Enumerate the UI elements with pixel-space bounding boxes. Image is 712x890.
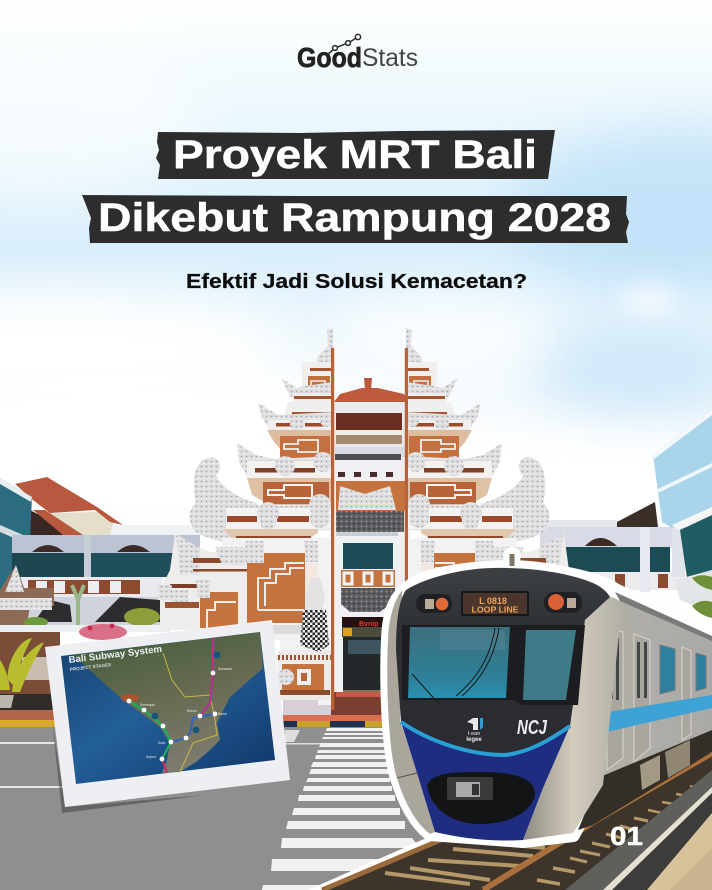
orange tiled roof bbox=[15, 477, 123, 525]
dark sloped roof bbox=[617, 502, 658, 527]
cyan curved line bbox=[401, 722, 570, 755]
steps bbox=[330, 692, 400, 716]
ledge and flowers bbox=[0, 625, 170, 632]
blue side stripe bbox=[602, 695, 712, 733]
wipers bbox=[412, 628, 499, 705]
left windscreen bbox=[408, 627, 510, 698]
right headlight bbox=[544, 592, 582, 613]
destination display: L 0818 bbox=[479, 596, 507, 606]
pale upper wall bbox=[105, 525, 205, 535]
glass tower teal lower bbox=[680, 515, 712, 578]
operator logo bbox=[466, 718, 483, 743]
railway track bbox=[308, 735, 712, 890]
blue route bbox=[171, 714, 215, 742]
upper window bbox=[343, 543, 393, 569]
page number: 01 bbox=[610, 821, 643, 851]
left headlight bbox=[416, 594, 452, 613]
land bbox=[73, 632, 263, 773]
temple gate right tower bbox=[405, 328, 581, 710]
icon: rising line chart bbox=[327, 34, 361, 55]
destination display: LOOP LINE bbox=[472, 604, 519, 614]
roof antenna bump bbox=[503, 547, 521, 565]
station labels: Kuta bbox=[158, 741, 165, 745]
statue with checked cloth bbox=[300, 578, 329, 652]
station labels: Renon bbox=[187, 709, 197, 713]
sea bbox=[61, 632, 275, 784]
right background building bbox=[540, 410, 712, 618]
destination display bbox=[461, 591, 529, 616]
square motif band bbox=[341, 570, 395, 587]
carved lintel bbox=[341, 588, 395, 612]
blue lower front bbox=[401, 722, 570, 841]
sleepers bbox=[385, 786, 700, 884]
temple gate left tower bbox=[158, 328, 334, 710]
open pavilion bbox=[334, 403, 406, 447]
undercarriage bbox=[578, 730, 712, 830]
operator logo: legee bbox=[466, 737, 482, 743]
ground: road bbox=[0, 710, 712, 890]
pale stone base bbox=[283, 695, 331, 715]
door signs bbox=[342, 617, 386, 629]
silver skirt right bbox=[523, 597, 622, 840]
side windows bbox=[660, 645, 675, 694]
near rail bbox=[483, 753, 712, 890]
entrance door bbox=[343, 637, 392, 690]
far rail bbox=[322, 836, 450, 890]
orange zone bbox=[121, 694, 139, 702]
roof edge bbox=[615, 592, 712, 641]
zebra crossing bbox=[262, 728, 420, 890]
title line 1 on torn tape: Proyek MRT Bali bbox=[173, 133, 537, 177]
temple gate centre bbox=[283, 378, 410, 716]
glass tower upper bbox=[653, 410, 712, 528]
logo: GoodStats bbox=[297, 34, 418, 73]
station labels: Sukawati bbox=[218, 667, 232, 671]
station labels: Seminyak bbox=[140, 703, 155, 707]
green plants bbox=[124, 608, 160, 626]
station labels bbox=[140, 667, 232, 759]
temple gate centre: Bvnip bbox=[359, 621, 378, 628]
dark front face bbox=[396, 568, 610, 757]
orange panel and carvings bbox=[336, 481, 406, 511]
map title: Bali Subway System bbox=[68, 644, 163, 666]
glass block bbox=[0, 478, 32, 600]
stage badges bbox=[152, 652, 220, 733]
side doors bbox=[607, 628, 691, 770]
station labels: Sanur bbox=[218, 712, 228, 716]
logo: GoodStats: Good bbox=[297, 42, 362, 73]
coupler housing bbox=[427, 772, 535, 824]
right windscreen bbox=[523, 630, 576, 700]
finial and tiled roof bbox=[364, 378, 372, 390]
cream gable wall bbox=[50, 512, 113, 535]
logo: GoodStats: Stats bbox=[362, 44, 418, 72]
dark eaves bbox=[30, 510, 77, 535]
green route bbox=[129, 701, 171, 759]
operator logo: I-ean bbox=[468, 731, 480, 737]
teal windows bbox=[12, 553, 84, 577]
door windows bbox=[610, 637, 647, 700]
platform surface bbox=[565, 770, 712, 890]
card shadow bbox=[52, 720, 205, 813]
yellow palm bbox=[0, 638, 44, 692]
magenta route bbox=[200, 638, 213, 716]
side body bbox=[600, 595, 712, 782]
pale lower wall with dark hedge bbox=[12, 597, 172, 627]
white frame bbox=[45, 620, 290, 807]
grey fascia bbox=[12, 535, 200, 554]
small shrine at left bbox=[0, 565, 54, 630]
windscreen frame bbox=[402, 625, 585, 705]
glass tower white slab bbox=[672, 507, 712, 530]
title line 2 on torn tape: Dikebut Rampung 2028 bbox=[98, 196, 611, 240]
silver skirt left bbox=[387, 590, 435, 834]
lower wall bbox=[0, 632, 60, 710]
stations bbox=[127, 671, 217, 761]
square motif band bbox=[12, 577, 162, 597]
station labels: Airport bbox=[146, 755, 156, 759]
roads bbox=[163, 653, 217, 772]
white stone and plants bbox=[675, 570, 712, 613]
map subtitle: PROJECT STAGES bbox=[70, 662, 111, 672]
train bbox=[387, 547, 712, 841]
white sticker outline bbox=[387, 567, 712, 841]
train emblem: NCJ bbox=[517, 717, 548, 739]
left background building bbox=[0, 477, 205, 711]
subtitle: Efektif Jadi Solusi Kemacetan? bbox=[186, 271, 527, 293]
photo card: Bali subway map bbox=[45, 620, 290, 813]
